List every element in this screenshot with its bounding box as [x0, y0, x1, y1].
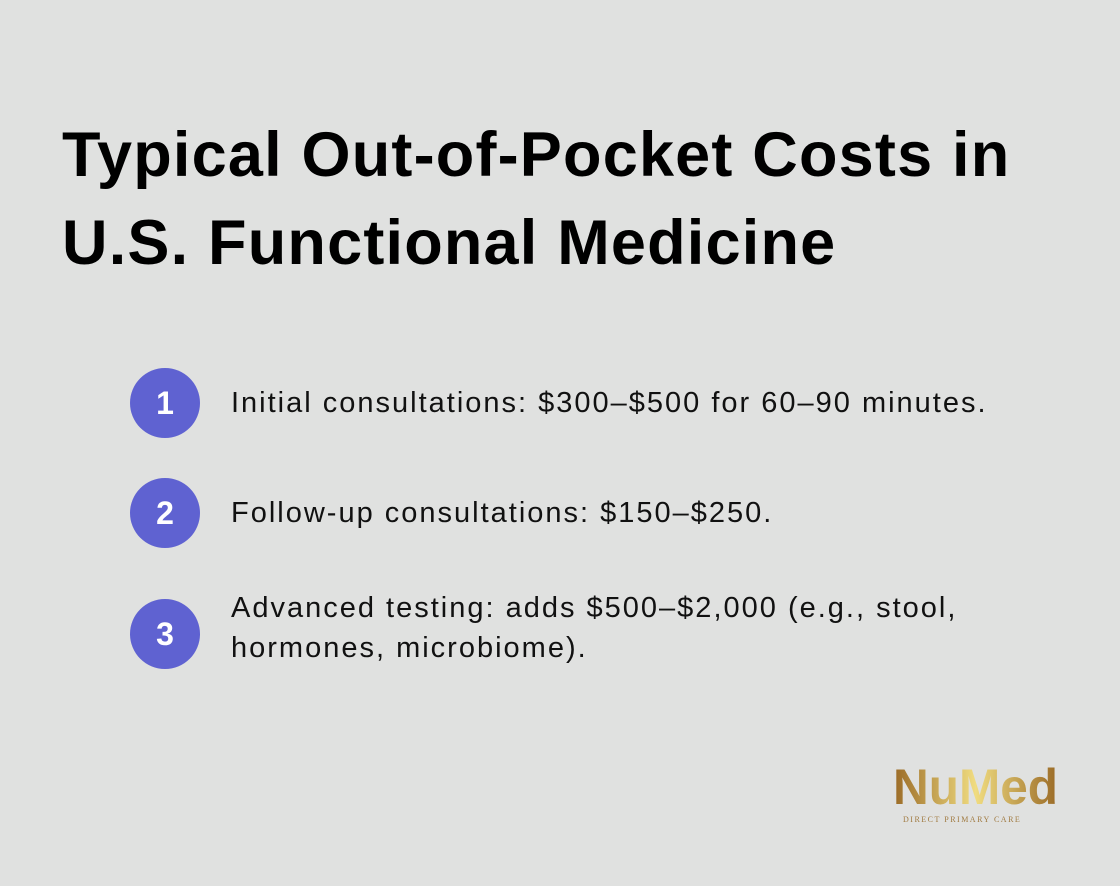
text 3: Advanced testing: adds $500–$2,000 (e.g., stool,	[231, 592, 957, 624]
icon: number 3: 3	[156, 616, 174, 652]
icon: number 3	[130, 599, 200, 669]
item 2	[130, 478, 773, 548]
icon: number 2: 2	[156, 495, 174, 531]
logo: DIRECT PRIMARY CARE	[903, 815, 1021, 824]
title: Typical Out-of-Pocket Costs in	[62, 120, 1010, 190]
text 1: Initial consultations: $300–$500 for 60–90 minutes.	[231, 387, 988, 419]
text 3	[231, 592, 957, 664]
logo: NuMed	[893, 760, 1058, 815]
text 2: Follow-up consultations: $150–$250.	[231, 497, 773, 529]
icon: number 1: 1	[156, 385, 174, 421]
text 3: hormones, microbiome).	[231, 632, 588, 664]
title	[62, 120, 1010, 278]
item 3	[130, 592, 957, 669]
icon: number 2	[130, 478, 200, 548]
title: U.S. Functional Medicine	[62, 208, 836, 278]
icon: number 1	[130, 368, 200, 438]
item 1	[130, 368, 988, 438]
